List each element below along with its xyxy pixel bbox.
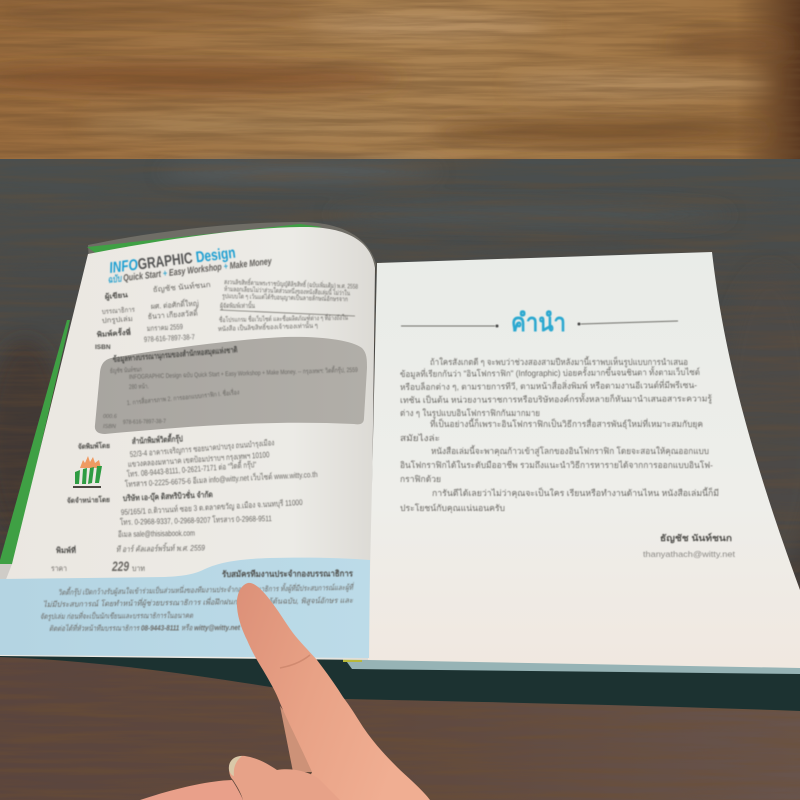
copyright notice: ห้ามลอกเลียนไม่ว่าส่วนใดส่วนหนึ่งของหนังสือเล่มนี้ ไม่ว่าใน (224, 284, 351, 297)
hand pointing at the band (140, 583, 430, 800)
distributor details: 95/165/1 ถ.ติวานนท์ ซอย 3 ต.ตลาดขวัญ อ.เมือง จ.นนทบุรี 11000 (121, 497, 303, 517)
preface body text: หรือบล็อกต่าง ๆ, ตามรายการทีวี, ตามหน้าสื่อสิ่งพิมพ์ หรือตามงานอีเวนต์ที่มีพรีเซน- (400, 379, 697, 392)
book credits: ปกรูปเล่ม (102, 316, 133, 325)
copyright notice: รูปแบบใด ๆ เว้นแต่ได้รับอนุญาตเป็นลายลักษณ์อักษรจาก (222, 291, 348, 303)
publisher details (78, 432, 318, 489)
preface body text (400, 356, 719, 514)
panel: staff recruitment band: ไม่มีประสบการณ์ โดยทำหน้าที่ผู้ช่วยบรรณาธิการ เพื่อฝึกฝนการตรวจแก้ต้นฉบับ, พิสูจน์อักษร และ (43, 595, 354, 609)
preface body text: ข้อมูลที่เรียกกันว่า "อินโฟกราฟิก" (Infographic) บ่อยครั้งมากขึ้นจนชินตา ทั้งตามเว็บไซต์ (400, 366, 700, 380)
book cast shadow (0, 654, 800, 711)
distributor details: บริษัท เอ-บุ๊ค ดิสทริบิวชั่น จำกัด (123, 488, 213, 504)
book title block (107, 245, 273, 286)
printer and price: บาท (132, 564, 145, 573)
panel: national library cataloguing data: 978-616-7897-38-7 (123, 419, 167, 426)
publisher details: แขวงคลองมหานาค เขตป้อมปราบฯ กรุงเทพฯ 10100 (128, 450, 270, 469)
panel: staff recruitment band: ติดต่อได้ที่หัวหน้าทีมบรรณาธิการ 08-9443-8111 หรือ witty@witty.net (49, 622, 240, 633)
distributor details: อีเมล sale@thisisabook.com (118, 529, 195, 539)
book credits: ผู้เขียน (104, 290, 128, 302)
thumb nail (229, 756, 242, 776)
printer and price: ราคา (51, 564, 67, 573)
icon: witty group logo (73, 456, 102, 488)
distributor details: จัดจำหน่ายโดย (67, 495, 110, 505)
panel: national library cataloguing data: ธัญชัช นันท์ชนก (110, 365, 142, 375)
distributor details: โทร. 0-2968-9337, 0-2968-9207 โทรสาร 0-2968-9511 (120, 513, 272, 527)
panel: national library cataloguing data: 1. การสื่อสารภาพ 2. การออกแบบกราฟิก I. ชื่อเรื่อง (126, 387, 240, 407)
right page (368, 252, 800, 668)
knuckle crease (280, 655, 310, 668)
book credits: ISBN (95, 344, 111, 351)
publisher details: 52/3-4 อาคารเจริญการ ซอยนาคปาบรุง ถนนบำรุงเมือง (129, 438, 275, 459)
author signature: ธัญชัช นันท์ชนก (660, 532, 732, 544)
book credits: 1 (127, 330, 131, 337)
preface body text: หนังสือเล่มนี้จะพาคุณก้าวเข้าสู่โลกของอินโฟกราฟิก โดยจะสอนให้คุณออกแบบ (431, 445, 709, 457)
left page (0, 224, 375, 660)
copyright notice: ชื่อโปรแกรม ชื่อเว็บไซต์ และชื่อผลิตภัณฑ์ต่าง ๆ ที่อ้างถึงใน (219, 313, 348, 324)
finger web between index and thumb (280, 706, 312, 772)
panel: staff recruitment band: วิตตี้กรุ๊ป เปิดกว้างรับผู้สนใจเข้าร่วมเป็นส่วนหนึ่งของทีมงานประจำกองบรรณาธิการ ทั้งผู้ที่มีประสบการณ์และผู้ที่ (58, 582, 355, 597)
title: INFOGRAPHIC Design: INFOGRAPHIC Design (108, 245, 237, 277)
book credits: ธันวา เกียงสวัสดิ์ (147, 307, 199, 321)
grey corner beneath page (0, 564, 12, 582)
copyright notice (218, 277, 358, 333)
wooden wall background (0, 0, 800, 160)
preface body text: ประโยชน์กับคุณแน่นอนครับ (400, 503, 505, 514)
preface body text: การันตีได้เลยว่าไม่ว่าคุณจะเป็นใคร เรียนหรือทำงานด้านไหน หนังสือเล่มนี้ก็มี (432, 487, 719, 499)
book credits: พิมพ์ครั้งที่ (96, 326, 131, 339)
brown table foreground (0, 655, 800, 800)
panel: national library cataloguing data (95, 337, 367, 434)
green cover edge (0, 224, 322, 566)
book credits: 978-616-7897-38-7 (144, 332, 195, 344)
subtitle: ฉบับ Quick Start + Easy Workshop + Make Money (107, 256, 273, 286)
preface body text: ถ้าใครสังเกตดี ๆ จะพบว่าช่วงสองสามปีหลังมานี้เราพบเห็นรูปแบบการนำเสนอ (430, 356, 688, 368)
printer and price: พิมพ์ที่ (56, 544, 76, 555)
author signature: thanyathach@witty.net (643, 549, 736, 559)
copyright notice: สงวนลิขสิทธิ์ตามพระราชบัญญัติลิขสิทธิ์ (ฉบับเพิ่มเติม) พ.ศ. 2558 (224, 277, 358, 291)
page sheet (0, 227, 375, 660)
book credits: บรรณาธิการ (102, 306, 135, 316)
heading: preface: คำนำ (511, 309, 566, 337)
copyright notice: หนังสือ เป็นลิขสิทธิ์ของเจ้าของเท่านั้น ๆ (218, 321, 318, 333)
copyright notice: ผู้จัดพิมพ์เท่านั้น (220, 301, 255, 310)
printer and price: 229 (111, 558, 129, 574)
panel: national library cataloguing data: ISBN (103, 424, 116, 430)
book credits: มกราคม 2559 (147, 322, 183, 333)
panel: staff recruitment band (0, 558, 370, 658)
book credits: ธัญชัช นันท์ชนก (152, 280, 211, 294)
author signature (643, 532, 736, 559)
panel: national library cataloguing data: INFOGRAPHIC Design ฉบับ Quick Start + Easy Workshop + Make Money. -- กรุงเทพฯ: วิตตี้กรุ๊ป, 2559 (129, 365, 358, 381)
panel heading: ข้อมูลทางบรรณานุกรมของสำนักหอสมุดแห่งชาติ (112, 344, 238, 365)
publisher details: โทร. 08-9443-8111, 0-2621-7171 ต่อ "วิตตี้ กรุ๊ป" (126, 458, 257, 479)
book cover back edge (88, 222, 376, 280)
preface body text: สมัยไงล่ะ (400, 433, 440, 443)
printer and price: ที อาร์ คัลเลอร์พริ้นท์ พ.ศ. 2559 (116, 541, 205, 554)
publisher details: โทรสาร 0-2225-6675-6 อีเมล info@witty.net เว็บไซต์ www.witty.co.th (125, 469, 318, 489)
index finger (237, 583, 430, 800)
book credits (95, 280, 211, 351)
preface body text: ที่เป็นอย่างนี้ก็เพราะอินโฟกราฟิกเป็นวิธีการสื่อสารพันธุ์ใหม่ที่เหมาะสมกับยุค (430, 418, 703, 430)
heading: preface (401, 309, 678, 337)
panel: national library cataloguing data: 000.6 (103, 414, 118, 420)
book credits: ผศ. ต่อศักดิ์ใหญ่ (150, 298, 199, 311)
preface body text: กราฟิกด้วย (400, 474, 441, 484)
preface body text: เทชัน เป็นต้น หน่วยงานราชการหรือบริษัทองค์กรทั้งหลายก็หันมานำเสนอสาระความรู้ (400, 392, 712, 406)
lower finger (140, 780, 243, 800)
book edge under right page (344, 658, 800, 674)
dark grey table surface (0, 159, 800, 679)
publisher details: สำนักพิมพ์วิตตี้กรุ๊ป (132, 432, 183, 447)
publisher details: จัดพิมพ์โดย (78, 441, 110, 451)
panel: national library cataloguing data: 280 หน้า. (129, 382, 149, 391)
band heading: รับสมัครทีมงานประจำกองบรรณาธิการ (222, 568, 353, 579)
preface body text: อินโฟกราฟิกได้ในระดับมืออาชีพ รวมถึงแนะนำวิธีการหารายได้จากการออกแบบอินโฟ- (400, 460, 713, 470)
preface body text: ต่าง ๆ ในรูปแบบอินโฟกราฟิกกันมากมาย (400, 408, 540, 419)
thumb (229, 756, 340, 800)
distributor details (67, 488, 303, 539)
panel: staff recruitment band: จัดรูปเล่ม ก่อนที่จะเป็นนักเขียนและบรรณาธิการในอนาคต (40, 610, 194, 621)
yellow tab at book edge (343, 657, 362, 662)
printer and price (51, 541, 205, 574)
